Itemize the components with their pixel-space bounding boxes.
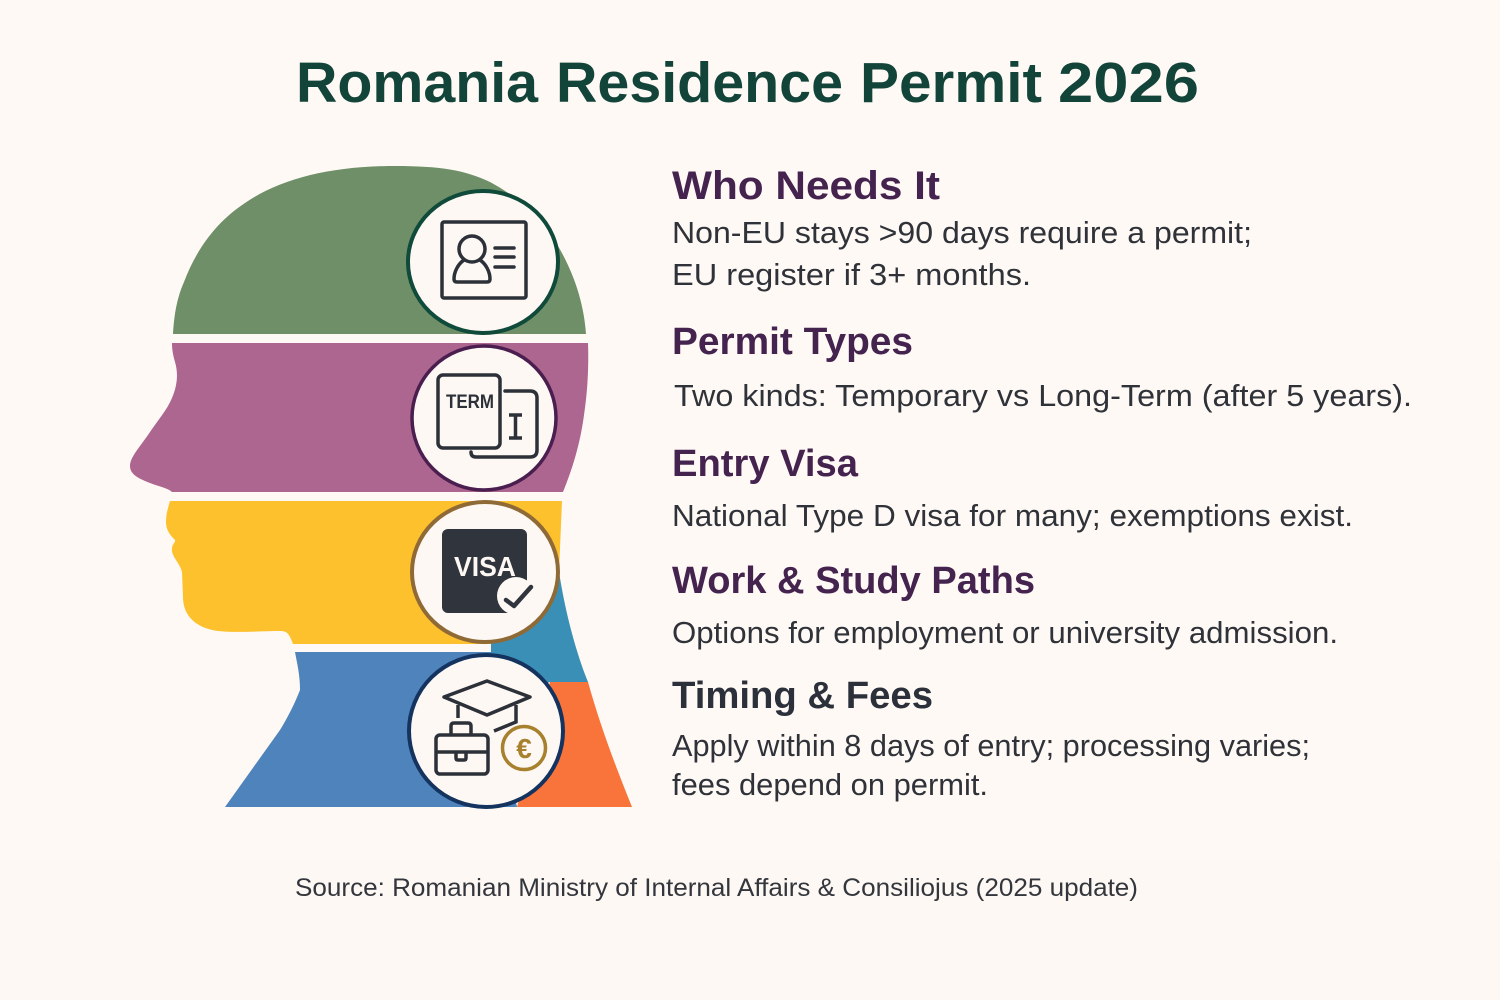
- section: timing and fees: Apply within 8 days of entry; processing varies;: [672, 728, 1310, 763]
- band: green crown: [173, 166, 586, 334]
- title: Permit: [860, 51, 1042, 115]
- section: who needs it: [672, 164, 1252, 292]
- band: teal neck back: [491, 572, 588, 700]
- icon: term documents: TERM: [446, 392, 494, 413]
- section: timing and fees: fees depend on permit.: [672, 767, 988, 802]
- title: 2026: [1058, 51, 1199, 115]
- section: entry visa: National Type D visa for many; exemptions exist.: [672, 498, 1353, 533]
- source note: Source: Romanian Ministry of Internal Affairs & Consiliojus (2025 update): [295, 874, 1138, 902]
- band: orange shoulder: [517, 682, 632, 807]
- icon: graduation cap, briefcase and euro: €: [516, 733, 532, 764]
- section: timing and fees: Timing & Fees: [672, 675, 933, 717]
- icon: id card: [408, 191, 558, 333]
- section: work and study paths: Work & Study Paths: [672, 560, 1035, 602]
- section: permit types: Two kinds: Temporary vs Long-Term (after 5 years).: [674, 378, 1412, 413]
- icon: visa stamp: [412, 502, 558, 642]
- section: timing and fees: [672, 675, 1310, 802]
- section: entry visa: [672, 443, 1353, 533]
- band: blue neck: [225, 652, 517, 807]
- head silhouette: [130, 166, 632, 807]
- icon: visa stamp: VISA: [454, 551, 516, 582]
- title: Romania: [296, 51, 539, 115]
- title: [296, 51, 1199, 115]
- section: work and study paths: [672, 560, 1338, 650]
- section: who needs it: Non-EU stays >90 days require a permit;: [672, 215, 1252, 250]
- section: work and study paths: Options for employment or university admission.: [672, 615, 1338, 650]
- title: Residence: [556, 51, 843, 115]
- icon: graduation cap, briefcase and euro: [409, 655, 563, 807]
- icon: term documents: [412, 346, 556, 490]
- section: who needs it: EU register if 3+ months.: [672, 257, 1031, 292]
- band: magenta forehead and nose: [130, 343, 588, 492]
- section: permit types: [672, 321, 1412, 413]
- section: permit types: Permit Types: [672, 321, 913, 363]
- section: who needs it: Who Needs It: [672, 164, 940, 208]
- band: yellow mouth and chin: [166, 501, 562, 644]
- section: entry visa: Entry Visa: [672, 443, 859, 485]
